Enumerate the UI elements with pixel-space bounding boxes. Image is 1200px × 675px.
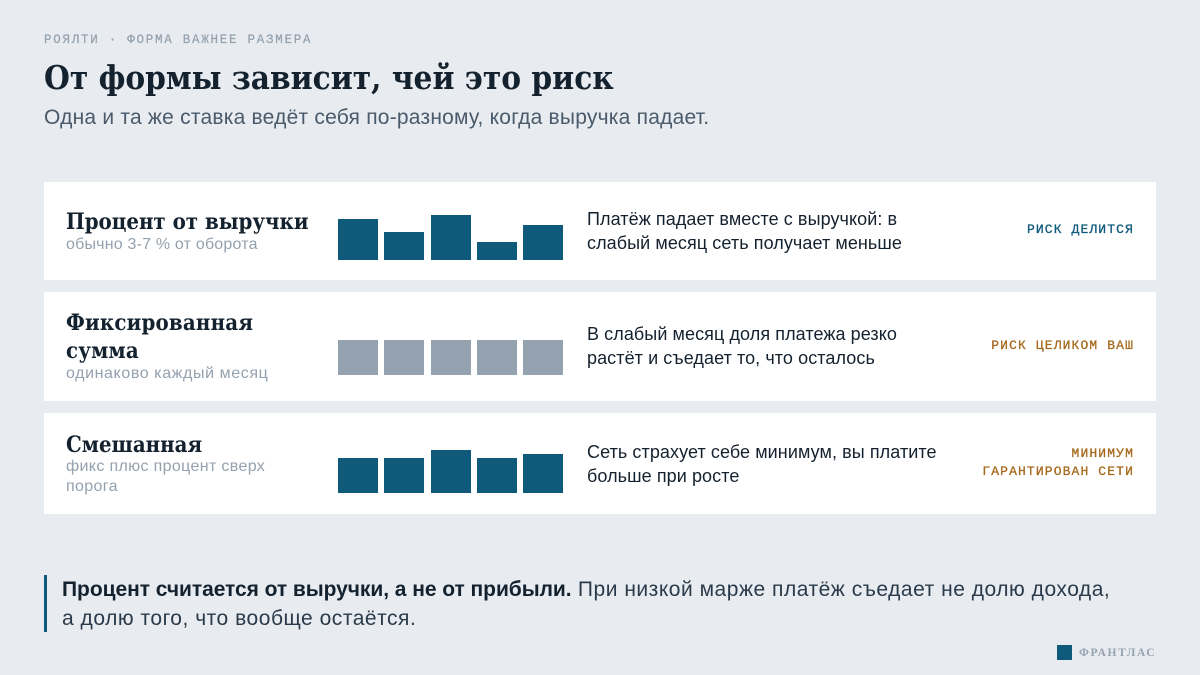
note: mixed — [66, 458, 265, 495]
risk label: shared: РИСК ДЕЛИТСЯ — [1027, 222, 1134, 237]
heading: percent of revenue: Процент от выручки — [66, 209, 309, 235]
eyebrow: РОЯЛТИ · ФОРМА ВАЖНЕЕ РАЗМЕРА — [44, 33, 312, 47]
title: От формы зависит, чей это риск — [44, 58, 614, 97]
note: mixed: порога — [66, 478, 118, 495]
icon: brand square — [1057, 645, 1072, 660]
bar chart: fixed sum — [338, 340, 563, 375]
heading: mixed: Смешанная — [66, 432, 202, 458]
heading: fixed sum: сумма — [66, 338, 139, 364]
description: fixed sum — [587, 324, 897, 368]
risk label: all yours: РИСК ЦЕЛИКОМ ВАШ — [991, 338, 1134, 353]
risk label: minimum guaranteed — [982, 446, 1134, 479]
note: fixed sum: одинаково каждый месяц — [66, 365, 268, 382]
description: mixed: больше при росте — [587, 466, 739, 486]
description: percent of revenue: Платёж падает вместе с выручкой: в — [587, 209, 897, 229]
panel: percent of revenue — [44, 182, 1156, 280]
brand name: ФРАНТЛАС — [1079, 647, 1156, 659]
callout text: Процент считается от выручки, а не от прибыли. При низкой марже платёж съедает не долю дохода, — [62, 578, 1110, 601]
panel: fixed sum — [44, 292, 1156, 401]
footer brand — [1057, 645, 1156, 660]
heading: fixed sum: Фиксированная — [66, 310, 253, 336]
heading: fixed sum — [66, 310, 253, 364]
description: mixed — [587, 442, 937, 486]
callout text — [62, 578, 1110, 630]
bar chart: percent of revenue — [338, 215, 563, 260]
panel: mixed — [44, 413, 1156, 514]
risk label: minimum guaranteed: МИНИМУМ — [1072, 446, 1134, 461]
note: percent of revenue: обычно 3-7 % от оборота — [66, 236, 258, 253]
description: percent of revenue: слабый месяц сеть получает меньше — [587, 233, 902, 253]
description: mixed: Сеть страхует себе минимум, вы платите — [587, 442, 937, 462]
description: percent of revenue — [587, 209, 902, 253]
note: mixed: фикс плюс процент сверх — [66, 458, 265, 475]
callout text: а долю того, что вообще остаётся. — [62, 607, 416, 630]
description: fixed sum: растёт и съедает то, что осталось — [587, 348, 875, 368]
risk label: minimum guaranteed: ГАРАНТИРОВАН СЕТИ — [982, 464, 1134, 479]
subtitle: Одна и та же ставка ведёт себя по-разному, когда выручка падает. — [44, 106, 709, 129]
bar chart: mixed — [338, 450, 563, 493]
callout: takeaway — [44, 575, 1127, 632]
description: fixed sum: В слабый месяц доля платежа резко — [587, 324, 897, 344]
